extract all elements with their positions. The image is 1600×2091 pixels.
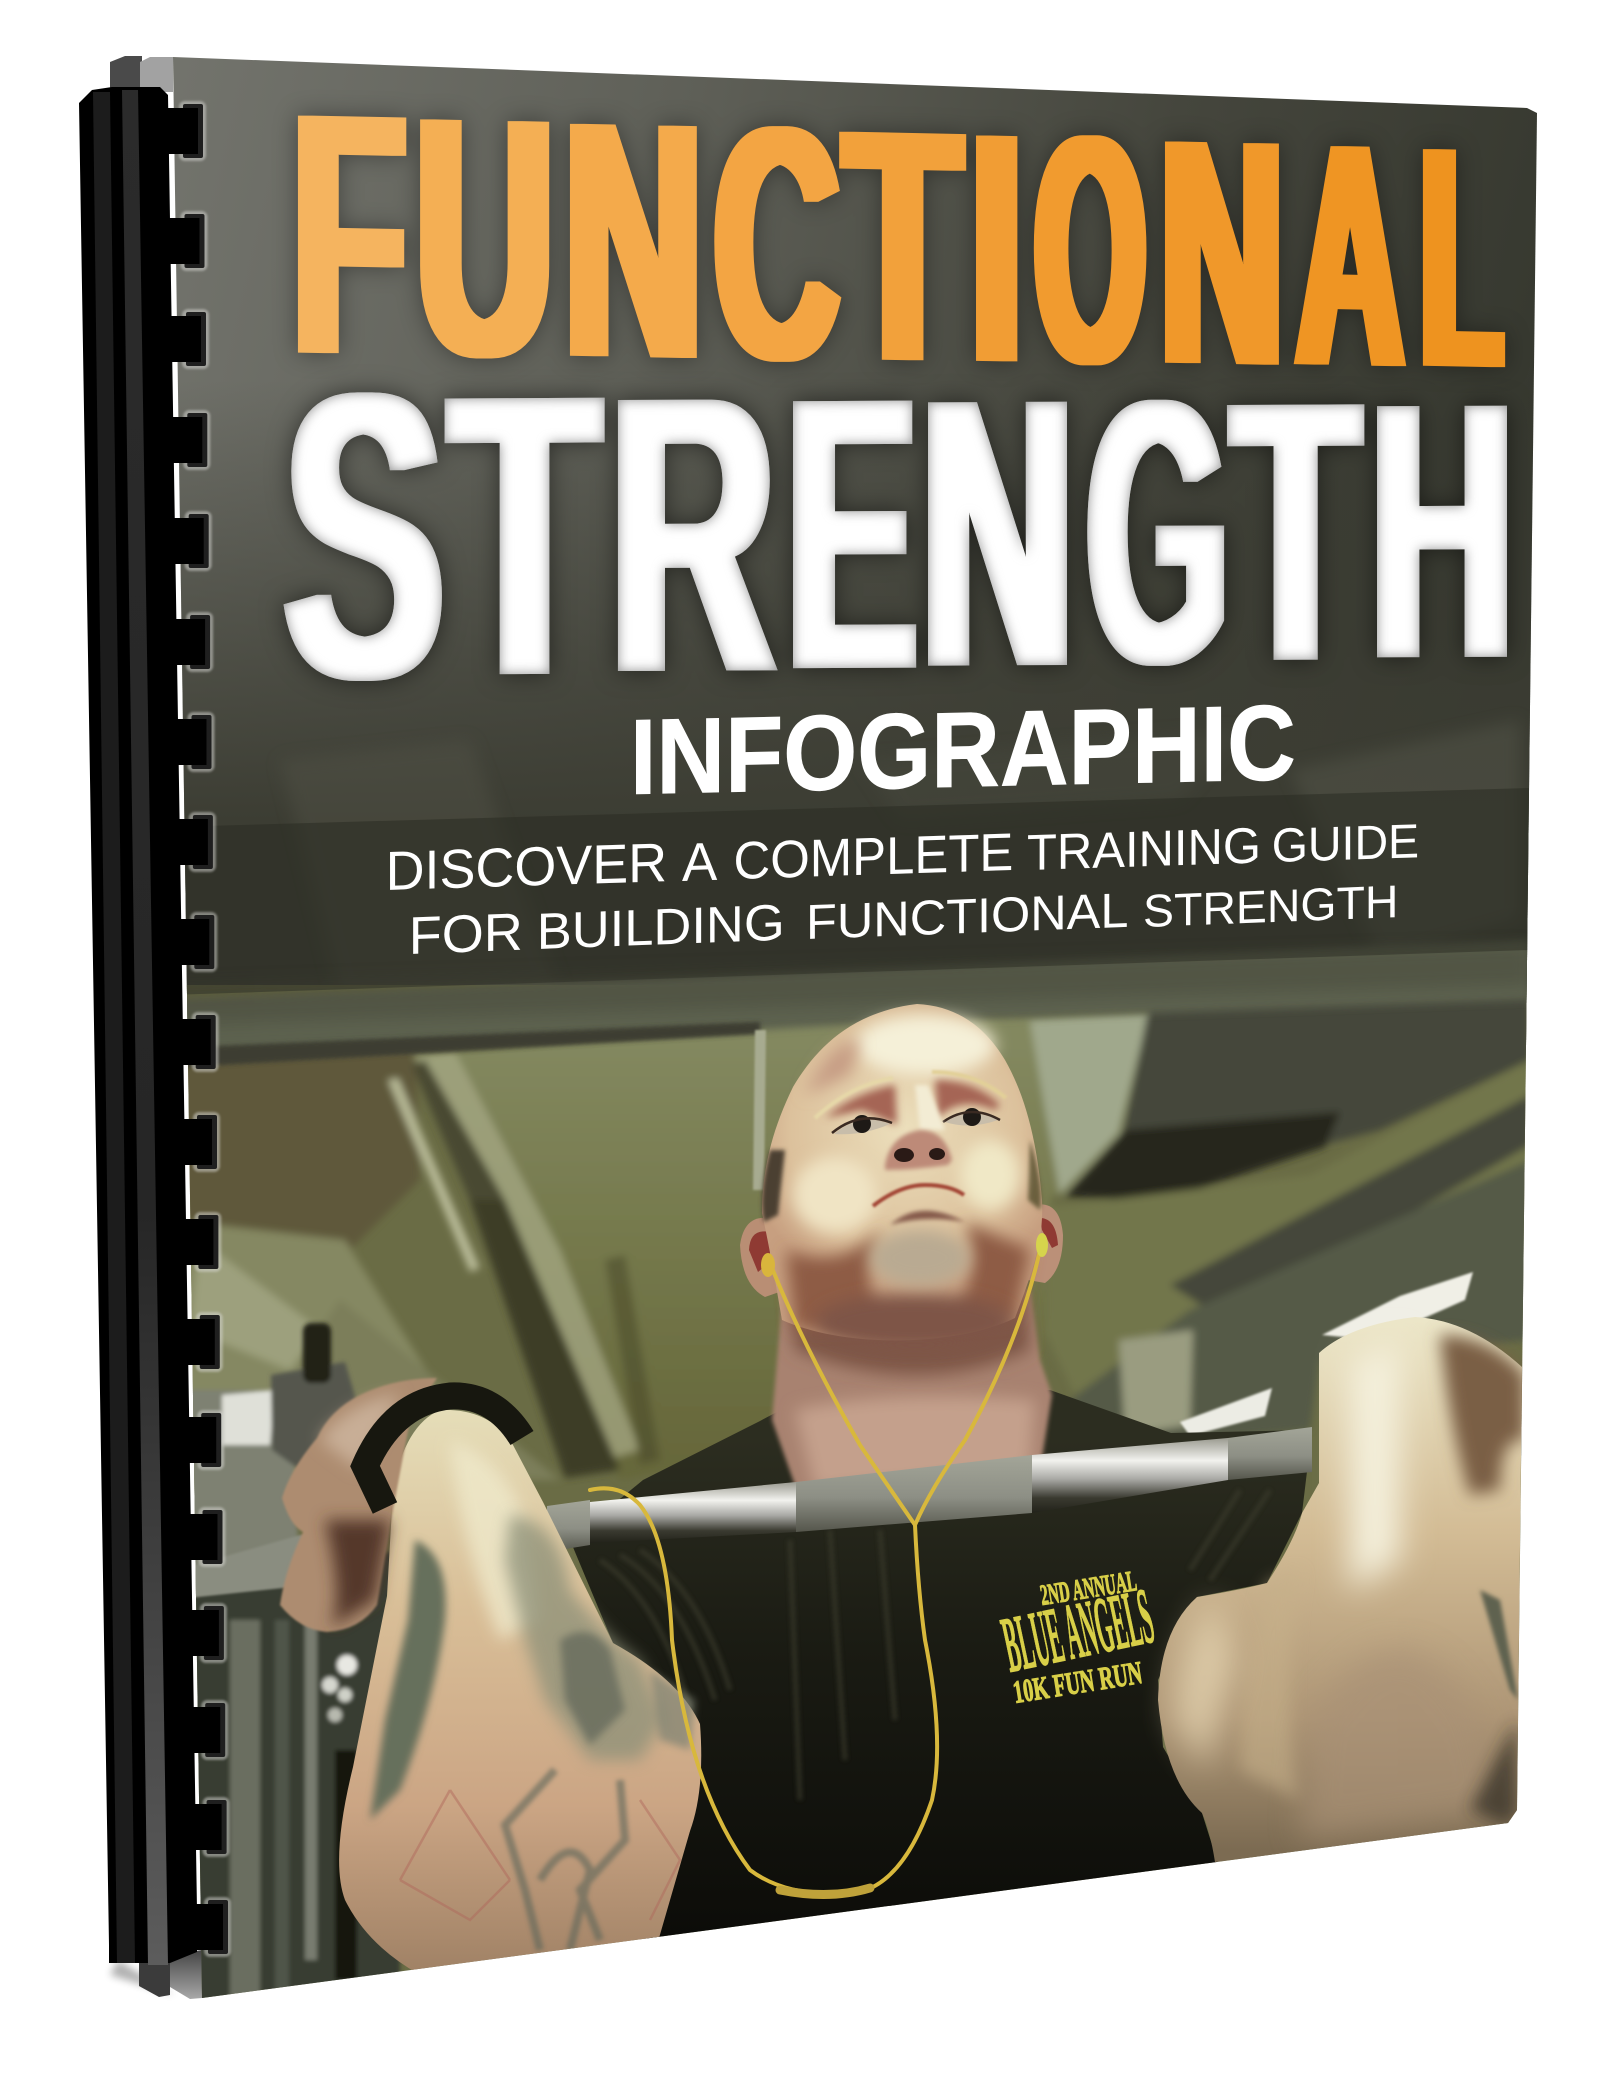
rack and left equipment <box>170 1323 400 2020</box>
barbell <box>547 1414 1525 1552</box>
binding coil teeth <box>158 101 231 1957</box>
title: STRENGTH: T <box>1232 323 1360 739</box>
tagline line 2: FOR <box>409 903 523 966</box>
barbell sleeve: right knurl <box>1228 1427 1312 1480</box>
dark text band overlay <box>170 788 1530 995</box>
bar left end <box>170 1535 340 1600</box>
title: FUNCTIONAL: A <box>1297 78 1403 434</box>
tagline line 1: TRAINING <box>1027 817 1261 881</box>
title: FUNCTIONAL: O <box>1035 68 1145 433</box>
lower right <box>1070 1160 1530 1450</box>
man: shirt <box>570 1390 1312 1950</box>
shirt logo <box>995 1565 1160 1710</box>
tagline line 2: BUILDING <box>537 893 785 960</box>
spine: highlight stripe <box>122 90 168 1965</box>
right arm: tattoo edge <box>1480 1590 1518 1700</box>
man: wristwatch <box>365 1396 522 1508</box>
man: right hand <box>1440 1335 1525 1495</box>
shirt logo: 2ND ANNUAL <box>1038 1565 1139 1612</box>
head: mouth <box>873 1185 964 1206</box>
man: left hand <box>280 1378 437 1632</box>
title: STRENGTH <box>284 308 1513 764</box>
title: FUNCTIONAL: U <box>416 46 554 429</box>
tagline line 2: FUNCTIONAL <box>806 882 1128 950</box>
tagline line 1 <box>386 815 1419 902</box>
man: head <box>762 1004 1042 1350</box>
earphone cable <box>590 1250 1040 1895</box>
left forearm: skull tattoo <box>505 1515 665 1760</box>
barbell sleeve: centre knurl <box>796 1455 1032 1532</box>
head: forehead highlight <box>855 1015 995 1075</box>
back cover tabs at bottom of book <box>139 1950 202 1999</box>
title: FUNCTIONAL: F <box>292 40 406 428</box>
shirt folds <box>600 1490 1270 1800</box>
tagline line 2: STRENGTH <box>1143 875 1398 937</box>
head: brows <box>815 1078 893 1118</box>
right diagonal olive <box>1045 1060 1530 1395</box>
panel pale edge <box>415 1052 640 1458</box>
title: STRENGTH: G <box>1087 322 1228 743</box>
right arm: forearm highlight <box>1350 1340 1400 1590</box>
title: STRENGTH: E <box>787 317 917 752</box>
ceiling pipe <box>170 940 1530 1062</box>
title: STRENGTH: H <box>1371 328 1513 736</box>
tagline line 1: GUIDE <box>1272 815 1419 873</box>
left forearm: red web <box>400 1790 680 1920</box>
title: FUNCTIONAL: T <box>844 62 961 432</box>
man: left forearm with tattoos <box>339 1410 701 1980</box>
dark beam <box>412 1060 505 1200</box>
right arm: lower muscle <box>1300 1650 1500 1840</box>
title: STRENGTH: N <box>921 319 1074 747</box>
right diagonal dark beam <box>1170 1095 1530 1320</box>
tagline line 2 <box>409 875 1398 966</box>
title: STRENGTH: T <box>449 310 600 760</box>
book shadow <box>110 1960 175 1995</box>
beam pale line <box>388 1078 480 1272</box>
title: FUNCTIONAL: I <box>970 65 1023 431</box>
ceiling lights <box>1322 1272 1473 1340</box>
head: cheek highlights <box>793 1157 877 1233</box>
title: FUNCTIONAL: N <box>1161 72 1283 434</box>
spine binder <box>79 87 197 1965</box>
left forearm: highlight <box>450 1440 540 1640</box>
barbell right end <box>1480 1414 1525 1460</box>
tagline line 1: COMPLETE <box>734 823 1013 891</box>
barbell sleeve: left small <box>547 1500 590 1552</box>
panel right pale <box>1030 1012 1149 1195</box>
man: shirt: BLUE ANGELS <box>995 1572 1160 1690</box>
soft dark blend at top of photo <box>170 945 1530 1025</box>
title: FUNCTIONAL: L <box>1421 82 1502 435</box>
vent <box>1065 1112 1340 1200</box>
tagline line 1: DISCOVER <box>386 832 667 902</box>
right arm: upper arm shadow crease <box>1240 1570 1300 1800</box>
man: ears <box>740 1204 1063 1297</box>
head: eyes <box>834 1120 890 1134</box>
cover: fade to ceiling <box>179 447 1533 1040</box>
head: jaw shadow <box>786 1228 900 1330</box>
title: STRENGTH: S <box>284 308 444 764</box>
title: STRENGTH: R <box>610 315 775 755</box>
head: nose <box>915 1085 945 1130</box>
title: FUNCTIONAL <box>292 40 1502 435</box>
spine: side stripe <box>93 92 135 1963</box>
head: chin <box>870 1230 970 1286</box>
cover: faint ceiling forms behind text <box>300 727 1516 823</box>
cover: dark upper area <box>160 50 1560 1050</box>
title: FUNCTIONAL: N <box>564 52 703 431</box>
right arm: elbow shadow <box>1470 1720 1517 1826</box>
back cover tabs at top of book <box>110 56 173 92</box>
man: right arm <box>1158 1317 1522 1862</box>
photo: gym ceiling background <box>170 940 1540 2020</box>
shirt logo: 10K FUN RUN <box>1010 1654 1144 1710</box>
earbuds <box>761 1233 1048 1277</box>
streak on panel <box>605 1255 660 1465</box>
dark right ceiling <box>1110 950 1530 1200</box>
title: FUNCTIONAL: C <box>714 57 839 431</box>
left forearm: wing tattoo <box>370 1540 446 1820</box>
tagline line 1: A <box>682 832 718 893</box>
left forearm: spider tattoo <box>505 1770 625 1950</box>
left ceiling <box>188 1054 420 1246</box>
man: neck <box>772 1290 1052 1500</box>
head: eye sockets <box>825 1085 897 1125</box>
central light panel <box>450 1017 1060 1476</box>
subheading: INFOGRAPHIC: INFOGRAPHIC <box>630 683 1296 817</box>
thin vertical pipe <box>753 1030 766 1190</box>
pillar <box>1119 1330 1193 1435</box>
